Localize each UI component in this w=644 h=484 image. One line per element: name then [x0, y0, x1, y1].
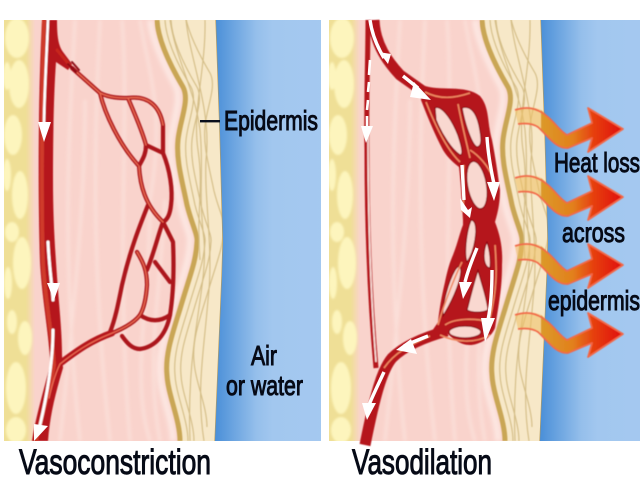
heading: Vasodilation: Vasodilation	[352, 443, 492, 482]
vessel: lighter trunk side	[36, 20, 54, 441]
arrow: heat 4	[515, 312, 623, 357]
arrow: heat 3	[515, 243, 623, 288]
label: Epidermis: Epidermis	[224, 105, 318, 136]
arrows: blood flow (white)	[367, 20, 494, 405]
heading: Vasoconstriction: Vasoconstriction	[19, 443, 211, 482]
leader line: epidermis	[200, 120, 220, 122]
label: across: across	[562, 217, 625, 248]
label: or water: or water	[226, 370, 303, 401]
arrows: blood flow	[34, 122, 60, 441]
panel: vasodilation skin cross-section	[328, 6, 644, 443]
label: Air: Air	[251, 340, 277, 371]
arrow: heat 1	[515, 107, 623, 152]
panel: vasoconstriction skin cross-section	[3, 6, 330, 443]
arrows: heat loss across epidermis	[515, 107, 623, 357]
vessel: main trunk	[32, 20, 72, 441]
vessels: dilated arteriole network	[365, 20, 502, 445]
vessels: constricted arteriole network	[32, 20, 174, 441]
arrow: heat 2	[515, 175, 623, 220]
